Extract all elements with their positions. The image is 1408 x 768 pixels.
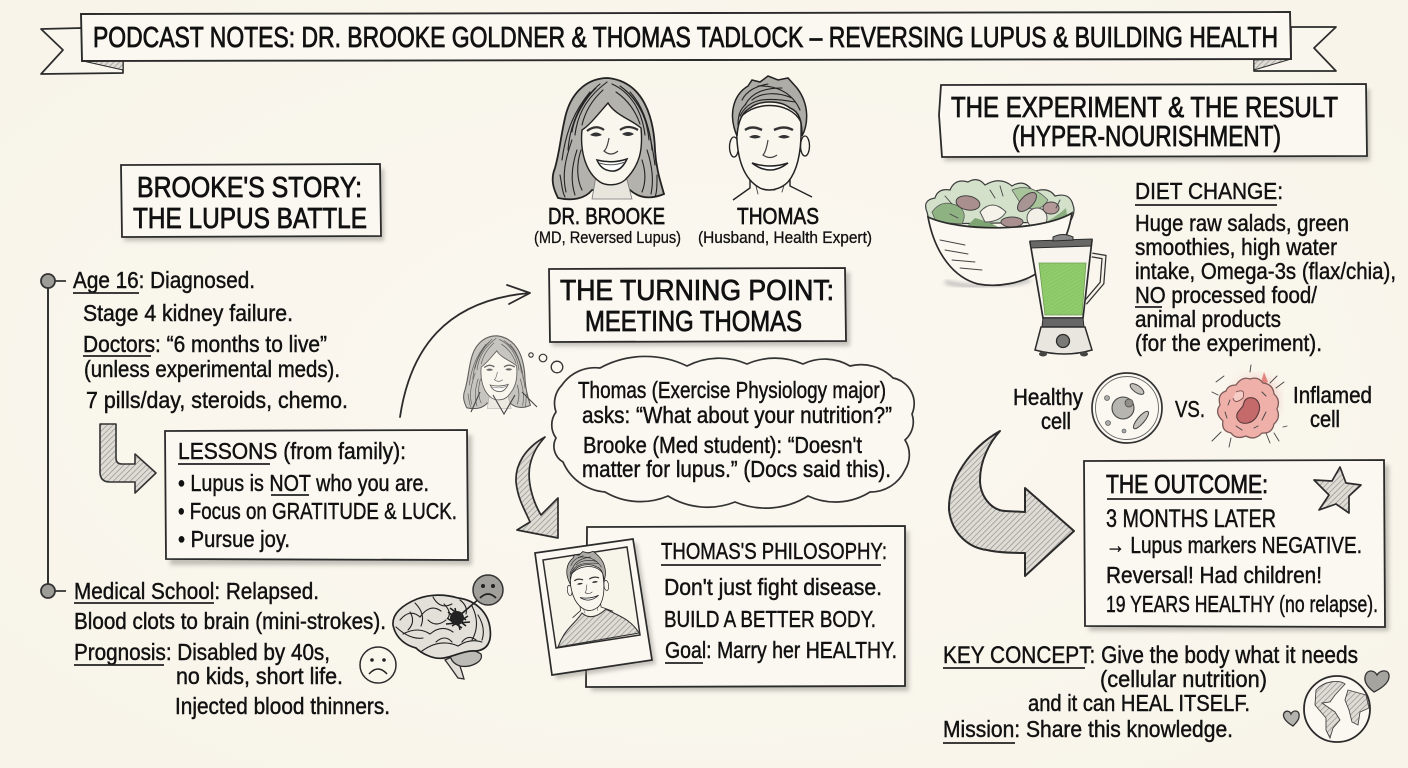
panel: Brooke's story heading: [121, 164, 384, 241]
panel: lessons: • Focus on GRATITUDE & LUCK.: [178, 498, 457, 524]
panel: Thomas's philosophy: THOMAS'S PHILOSOPHY:: [661, 538, 887, 564]
icon: star: [1314, 467, 1361, 513]
timeline: [41, 274, 66, 598]
icon: brain with clot: [393, 575, 503, 679]
arrow: to turning point: [400, 285, 530, 417]
panel: the outcome: [1084, 460, 1389, 631]
text block: medical school relapse: no kids, short life.: [176, 663, 343, 689]
text block: key concept and mission: KEY CONCEPT: Give the body what it needs: [943, 642, 1358, 669]
text block: age 16 diagnosis: [73, 267, 348, 413]
caption: Thomas: (Husband, Health Expert): [698, 228, 872, 247]
label: inflamed cell: cell: [1310, 406, 1340, 432]
panel: the outcome: Reversal! Had children!: [1106, 562, 1322, 588]
caption: Dr. Brooke: DR. BROOKE: [548, 203, 665, 229]
portrait: Thomas: [730, 76, 812, 200]
text block: age 16 diagnosis: Doctors: “6 months to live”: [83, 331, 327, 357]
text block: diet change: [1135, 178, 1396, 356]
panel: lessons: LESSONS (from family):: [178, 438, 406, 464]
text: versus: VS.: [1175, 396, 1205, 422]
photo: Thomas polaroid: [535, 539, 656, 679]
thought cloud: nutrition conversation: [552, 356, 914, 508]
text block: diet change: smoothies, high water: [1135, 234, 1337, 260]
caption: Thomas: THOMAS: [737, 203, 819, 229]
panel: the outcome: THE OUTCOME:: [1106, 469, 1268, 499]
icon: Brooke thinking: [464, 336, 563, 414]
panel: lessons: [165, 430, 472, 565]
label: healthy cell: [1013, 384, 1083, 434]
icon: inflamed cell: [1212, 365, 1287, 447]
text block: diet change: Huge raw salads, green: [1135, 210, 1349, 236]
text block: key concept and mission: (cellular nutrition): [1100, 666, 1267, 692]
text block: age 16 diagnosis: (unless experimental meds).: [84, 356, 340, 382]
panel: lessons: • Lupus is NOT who you are.: [178, 470, 429, 496]
thought cloud: nutrition conversation: matter for lupus.” (Docs said this).: [582, 456, 891, 482]
label: healthy cell: Healthy: [1013, 384, 1083, 410]
caption: Thomas: [698, 203, 872, 247]
portrait: Dr. Brooke: [553, 78, 664, 199]
panel: experiment heading: [939, 84, 1370, 161]
title banner: [41, 12, 1336, 74]
panel: Brooke's story heading: THE LUPUS BATTLE: [133, 203, 367, 235]
panel: Thomas's philosophy: [586, 526, 909, 691]
icon: salad bowl: [926, 180, 1074, 287]
text block: age 16 diagnosis: 7 pills/day, steroids, chemo.: [86, 387, 348, 413]
label: healthy cell: cell: [1041, 408, 1071, 434]
panel: Thomas's philosophy: Goal: Marry her HEALTHY.: [665, 637, 897, 663]
icon: sad face: [360, 647, 396, 683]
panel: experiment heading: THE EXPERIMENT & THE RESULT: [951, 92, 1338, 124]
text block: key concept and mission: and it can HEAL ITSELF.: [1028, 690, 1250, 716]
caption: Dr. Brooke: [534, 203, 681, 247]
caption: Dr. Brooke: (MD, Reversed Lupus): [534, 228, 681, 247]
panel: Thomas's philosophy: Don't just fight disease.: [664, 574, 882, 600]
arrow: to Thomas's philosophy: [516, 437, 558, 538]
icon: healthy cell: [1092, 373, 1162, 443]
text block: key concept and mission: [943, 642, 1358, 743]
thought cloud: nutrition conversation: Thomas (Exercise Physiology major): [578, 377, 886, 403]
icon: blender with green smoothie: [1030, 234, 1104, 356]
text block: medical school relapse: [74, 578, 390, 719]
text block: diet change: DIET CHANGE:: [1135, 178, 1283, 204]
panel: lessons: • Pursue joy.: [178, 526, 290, 552]
thought cloud: nutrition conversation: Brooke (Med student): “Doesn't: [583, 432, 863, 458]
text block: medical school relapse: Injected blood thinners.: [175, 693, 390, 719]
label: inflamed cell: [1293, 382, 1372, 432]
panel: turning point heading: MEETING THOMAS: [585, 306, 802, 338]
text block: medical school relapse: Prognosis: Disabled by 40s,: [74, 639, 330, 665]
icon: globe with hearts: [1283, 671, 1389, 742]
arrow: to the outcome: [949, 431, 1074, 576]
arrow: to lessons: [100, 424, 156, 493]
label: inflamed cell: Inflamed: [1293, 382, 1372, 408]
thought cloud: nutrition conversation: asks: “What about your nutrition?”: [582, 402, 892, 428]
text block: age 16 diagnosis: Age 16: Diagnosed.: [73, 267, 255, 293]
panel: the outcome: → Lupus markers NEGATIVE.: [1106, 532, 1362, 558]
text block: diet change: NO processed food/: [1135, 282, 1318, 308]
text block: medical school relapse: Blood clots to brain (mini-strokes).: [74, 608, 386, 634]
text block: age 16 diagnosis: Stage 4 kidney failure.: [83, 300, 293, 326]
panel: Thomas's philosophy: BUILD A BETTER BODY.: [664, 606, 876, 632]
panel: turning point heading: THE TURNING POINT:: [560, 275, 834, 307]
panel: Brooke's story heading: BROOKE'S STORY:: [137, 172, 362, 204]
text block: key concept and mission: Mission: Share this knowledge.: [943, 716, 1233, 742]
text block: medical school relapse: Medical School: Relapsed.: [74, 578, 319, 604]
panel: the outcome: 3 MONTHS LATER: [1106, 505, 1276, 533]
panel: turning point heading: [549, 268, 850, 346]
panel: experiment heading: (HYPER-NOURISHMENT): [1012, 121, 1281, 153]
text block: diet change: animal products: [1135, 306, 1281, 332]
text block: diet change: (for the experiment).: [1135, 330, 1322, 356]
